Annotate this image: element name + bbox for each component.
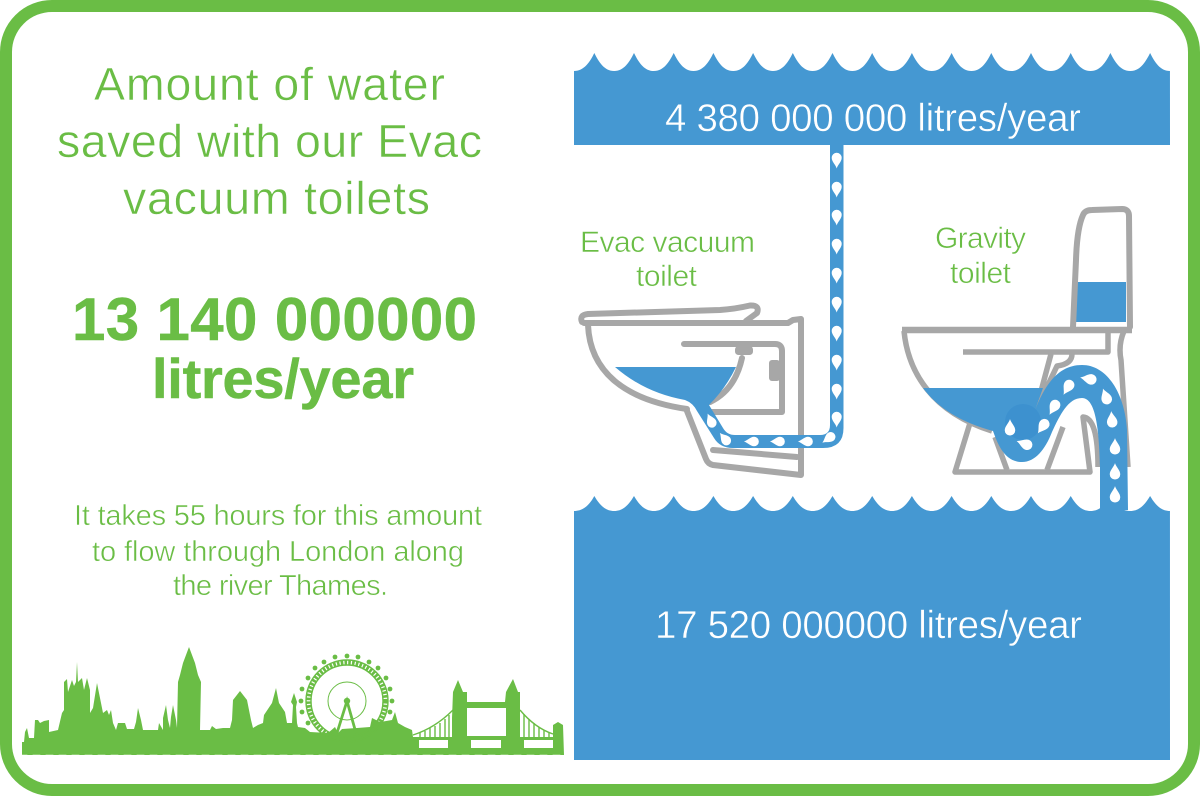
cistern (1073, 209, 1130, 327)
title (57, 58, 482, 224)
Gravity toilet label: Gravity (935, 222, 1026, 255)
cistern water (1076, 282, 1126, 322)
Gravity toilet label: toilet (950, 257, 1012, 290)
river edge scallops (20, 755, 566, 757)
Evac toilet label: toilet (636, 260, 698, 293)
water and pipe (615, 145, 844, 448)
saved water tank: top band (574, 53, 1170, 145)
trap droplets (1005, 372, 1120, 503)
headline figure: 13 140 000000 (72, 286, 477, 353)
bridge openings (419, 708, 553, 748)
Evac toilet label (580, 226, 755, 293)
bridge cables (413, 710, 553, 737)
icon: Evac vacuum toilet (581, 145, 844, 475)
title: saved with our Evac (57, 115, 482, 167)
title: vacuum toilets (123, 172, 430, 224)
London Eye (299, 654, 394, 742)
headline figure (72, 286, 477, 410)
top band value: 4 380 000 000 litres/year (665, 97, 1081, 140)
Thames comparison text: to flow through London along (92, 536, 464, 568)
Thames comparison text (74, 500, 482, 602)
Gravity toilet label (935, 222, 1026, 290)
icon: gravity toilet (902, 209, 1132, 510)
London skyline (20, 647, 566, 756)
pipe droplets (703, 153, 842, 447)
Thames comparison text: the river Thames. (173, 570, 388, 602)
bottom band value: 17 520 000000 litres/year (655, 604, 1082, 647)
Evac toilet label: Evac vacuum (580, 226, 755, 259)
headline figure: litres/year (152, 347, 414, 410)
bowl and base (902, 327, 1132, 333)
Thames comparison text: It takes 55 hours for this amount (74, 500, 482, 532)
bowl water and trap (923, 365, 1128, 510)
title: Amount of water (94, 58, 445, 110)
wasted water tank: bottom band (574, 496, 1170, 760)
